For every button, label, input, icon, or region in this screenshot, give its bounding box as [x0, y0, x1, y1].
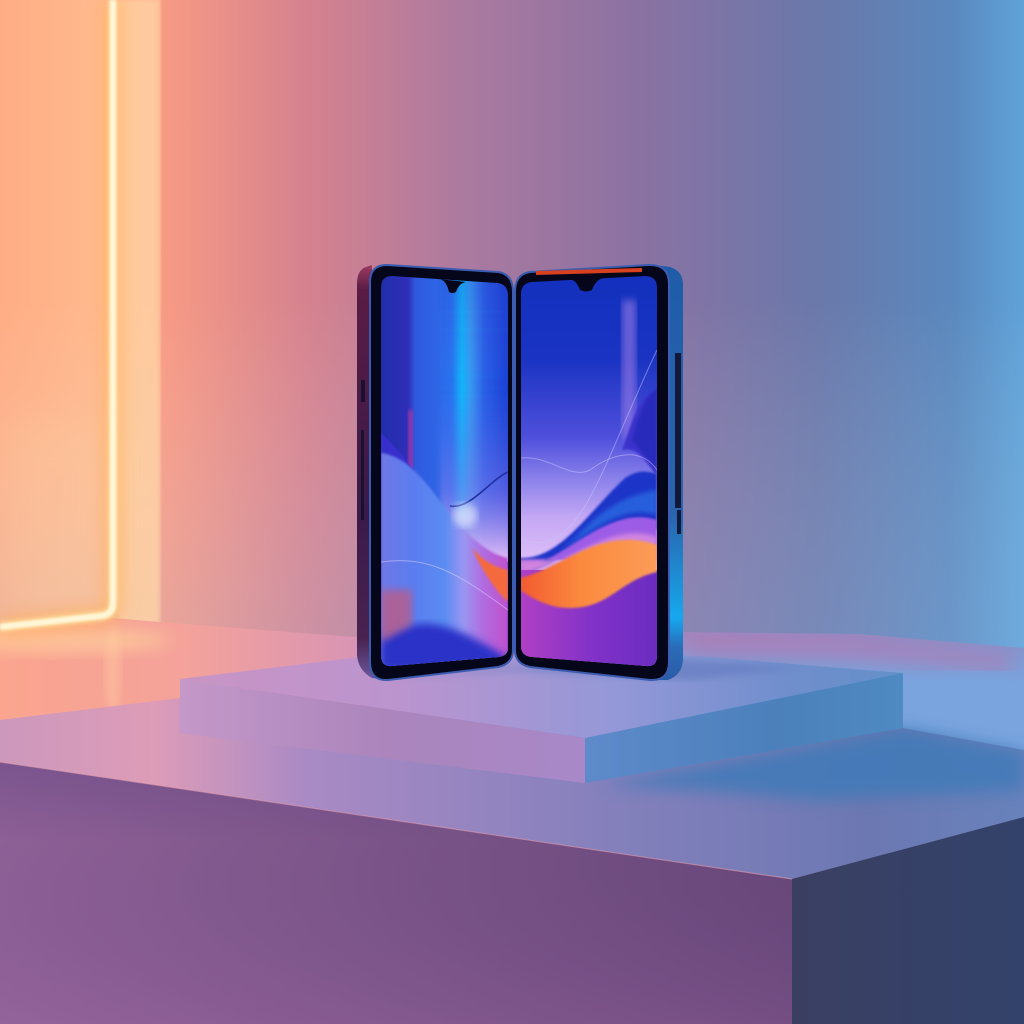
right phone side frame	[650, 265, 683, 680]
large pedestal block	[0, 698, 1024, 1024]
platform front-left face	[180, 679, 585, 783]
small platform	[180, 655, 903, 783]
block top surface	[0, 698, 1024, 879]
neon light strip	[0, 0, 113, 627]
right screen blue wave	[520, 472, 657, 575]
right phone	[515, 265, 683, 680]
back wall	[0, 0, 1024, 660]
right phone notch	[568, 278, 604, 292]
left phone bezel	[370, 265, 513, 680]
left phone screen	[380, 270, 510, 670]
block front face	[0, 762, 792, 1024]
left phone notch	[438, 279, 466, 293]
left screen light wave	[381, 453, 508, 670]
phone pair	[357, 265, 683, 680]
right screen lower purple	[520, 570, 660, 670]
left screen orange swoosh	[472, 548, 508, 602]
right screen blue upper shape	[622, 389, 657, 475]
left screen lower blue	[381, 624, 508, 670]
right phone screen	[520, 270, 660, 670]
right screen purple band	[520, 517, 657, 572]
left phone	[357, 265, 513, 680]
right screen orange swoosh	[520, 540, 657, 608]
platform front-right face	[585, 673, 903, 783]
floor	[0, 610, 1024, 800]
block right face	[792, 817, 1024, 1024]
platform top	[180, 655, 903, 738]
left screen purple wave	[381, 433, 508, 670]
left phone side frame	[357, 265, 385, 680]
right phone bezel	[515, 265, 669, 680]
